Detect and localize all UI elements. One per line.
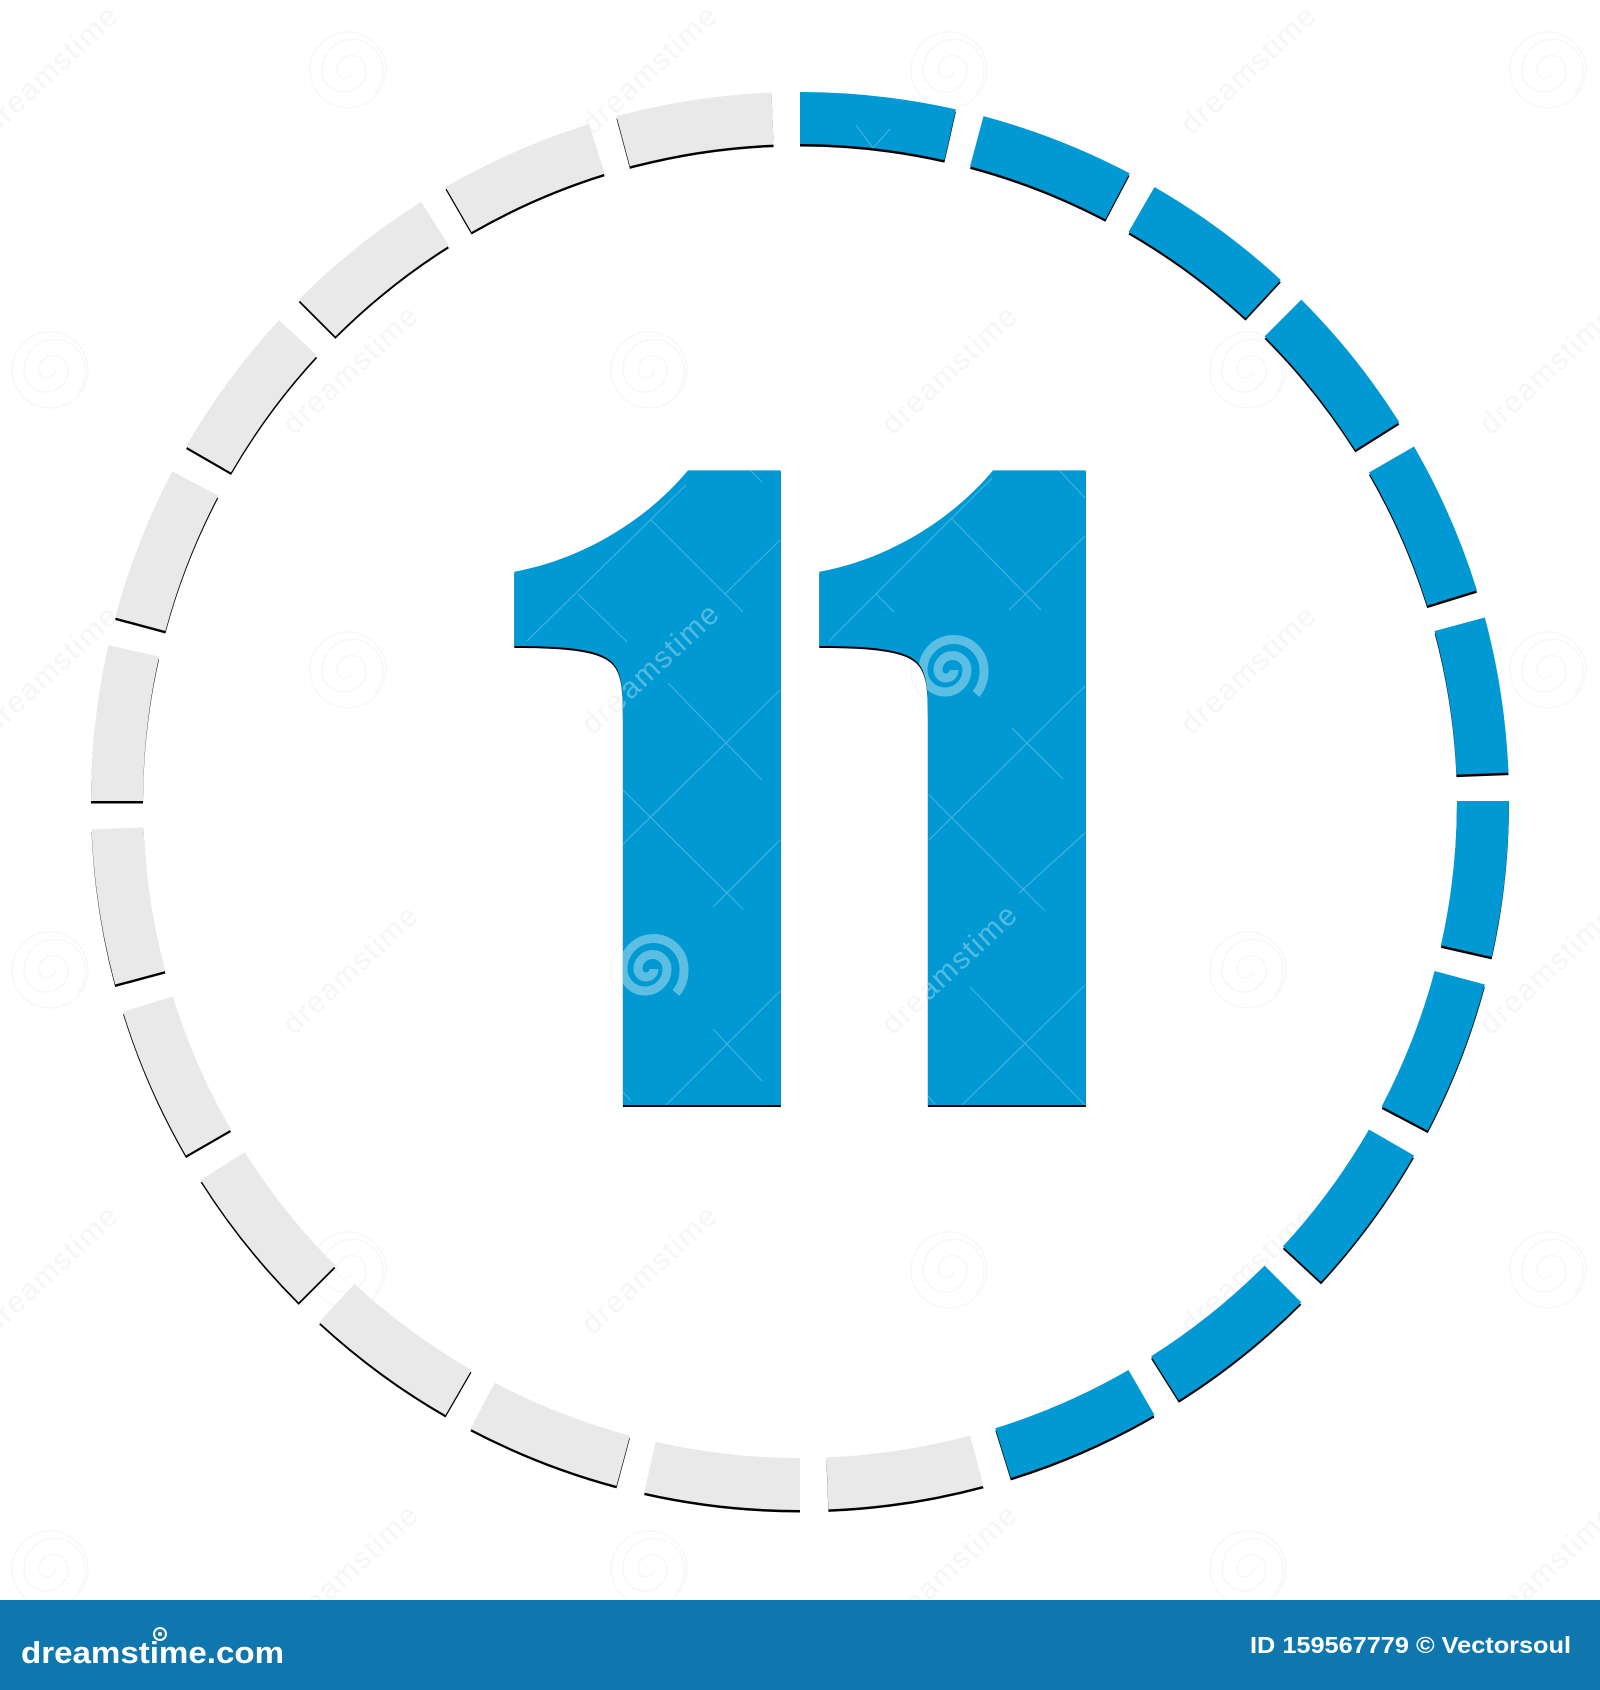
watermark pattern: dreamstime xyxy=(575,0,723,141)
watermark pattern: dreamstime xyxy=(875,1499,1023,1640)
watermark pattern: dreamstime xyxy=(1174,1200,1322,1341)
watermark over digits: dreamstime xyxy=(875,899,1023,1040)
segment 23 empty xyxy=(446,109,615,248)
segment 14 empty xyxy=(466,1380,634,1488)
footer bar xyxy=(0,1600,1600,1690)
segment 24 empty xyxy=(616,76,785,184)
progress ring: 11 of 24 segments filled xyxy=(75,76,1525,1529)
first digit 1 xyxy=(514,470,781,1107)
segment 3 filled xyxy=(1120,187,1290,326)
segment 5 filled xyxy=(1355,446,1492,618)
segment 2 filled xyxy=(966,116,1134,225)
watermark pattern: dreamstime xyxy=(575,1200,723,1341)
segment 9 filled xyxy=(1277,1121,1414,1293)
segment 13 empty xyxy=(644,1442,800,1512)
segment 6 filled xyxy=(1419,617,1525,788)
segment 16 empty xyxy=(188,1144,347,1305)
watermark pattern: dreamstime xyxy=(1174,600,1322,741)
watermark over digits: dreamstime xyxy=(577,598,725,739)
segment 7 filled xyxy=(1441,801,1509,959)
watermark pattern: dreamstime xyxy=(875,300,1023,441)
segment 10 filled xyxy=(1143,1254,1301,1415)
footer image id credit: ID 159567779 © Vectorsoul xyxy=(1250,1632,1571,1658)
segment 17 empty xyxy=(108,986,245,1158)
footer logo text: dreamstime.com xyxy=(21,1635,284,1670)
watermark pattern: dreamstime xyxy=(276,1499,424,1640)
watermark pattern: dreamstime xyxy=(1174,0,1322,141)
big number 11 xyxy=(514,470,1086,1107)
watermark pattern: dreamstime xyxy=(276,300,424,441)
watermark over digits xyxy=(527,471,1085,1105)
segment 12 empty xyxy=(815,1420,984,1529)
watermark pattern: dreamstime xyxy=(276,900,424,1041)
segment 21 empty xyxy=(186,311,323,483)
segment 4 filled xyxy=(1253,300,1412,461)
second digit 1 xyxy=(819,470,1086,1107)
watermark pattern: dreamstime xyxy=(575,600,723,741)
watermark pattern: dreamstime xyxy=(875,900,1023,1041)
segment 1 filled xyxy=(800,92,956,163)
segment 8 filled xyxy=(1379,967,1485,1138)
segment 11 filled xyxy=(985,1356,1154,1495)
segment 19 empty xyxy=(91,645,159,804)
segment 20 empty xyxy=(115,467,221,638)
segment 15 empty xyxy=(310,1278,480,1418)
segment 18 empty xyxy=(75,816,181,987)
segment 22 empty xyxy=(299,189,457,350)
